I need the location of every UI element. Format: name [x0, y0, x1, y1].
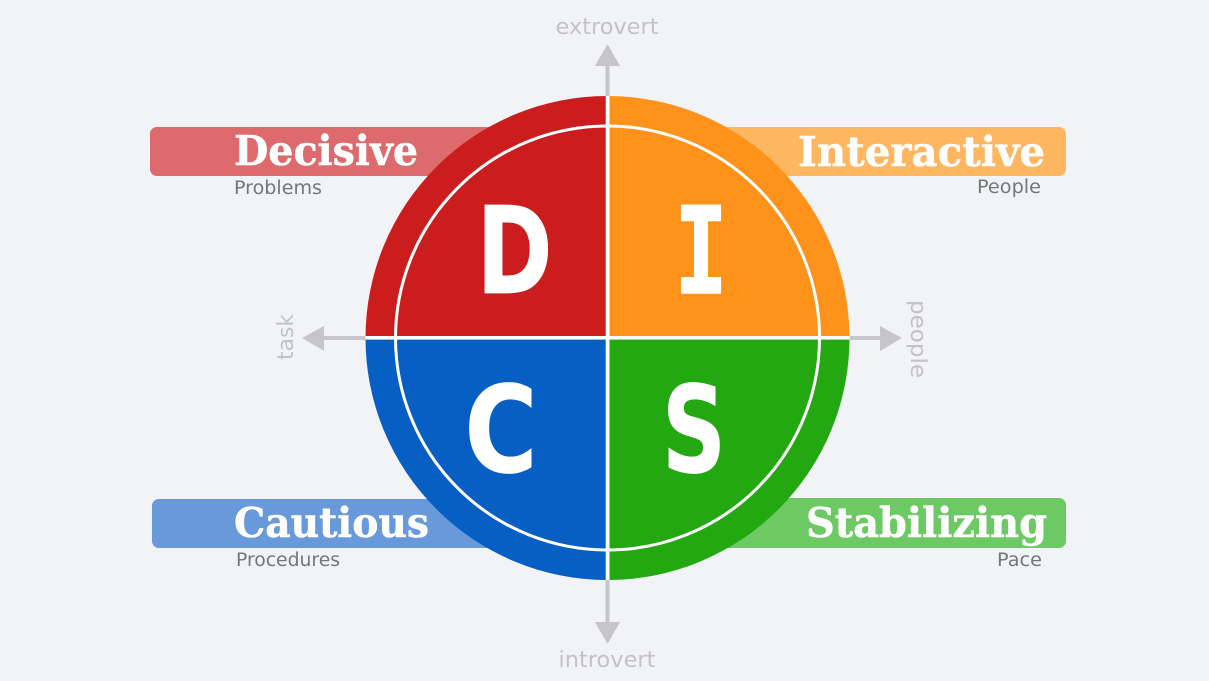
quadrant: S green — [608, 338, 850, 580]
letter C: C — [464, 362, 538, 501]
heading: Stabilizing: Stabilizing — [806, 499, 1047, 547]
quadrant: D red — [366, 96, 608, 338]
arrow: right — [846, 326, 902, 351]
inner ring — [396, 126, 820, 550]
heading: Interactive: Interactive — [798, 128, 1045, 176]
DISC circle — [366, 96, 850, 580]
banner: Interactive — [706, 127, 1066, 198]
arrow: up — [595, 44, 620, 100]
quadrant: I orange — [608, 96, 850, 338]
caption: Procedures: Procedures — [236, 550, 340, 571]
banner: Cautious — [152, 499, 512, 571]
heading: Decisive: Decisive — [234, 127, 418, 175]
caption: Pace: Pace — [997, 550, 1042, 571]
heading: Cautious: Cautious — [234, 499, 429, 547]
axis label: people: people — [905, 300, 930, 378]
letter D: D — [476, 183, 552, 322]
vertical divider — [606, 96, 610, 580]
axis label: task: task — [274, 314, 299, 360]
axis label: extrovert: extrovert — [556, 15, 659, 40]
letter I: I — [674, 183, 728, 322]
caption: Problems: Problems — [234, 178, 322, 199]
caption: People: People — [977, 177, 1041, 198]
banner: Decisive — [150, 127, 510, 199]
horizontal divider — [366, 336, 850, 340]
axis label: introvert: introvert — [558, 648, 656, 673]
arrow: left — [302, 326, 370, 351]
banner: Stabilizing — [706, 498, 1066, 571]
quadrant: C blue — [366, 338, 608, 580]
letter S: S — [662, 362, 726, 501]
arrow: down — [595, 576, 620, 644]
